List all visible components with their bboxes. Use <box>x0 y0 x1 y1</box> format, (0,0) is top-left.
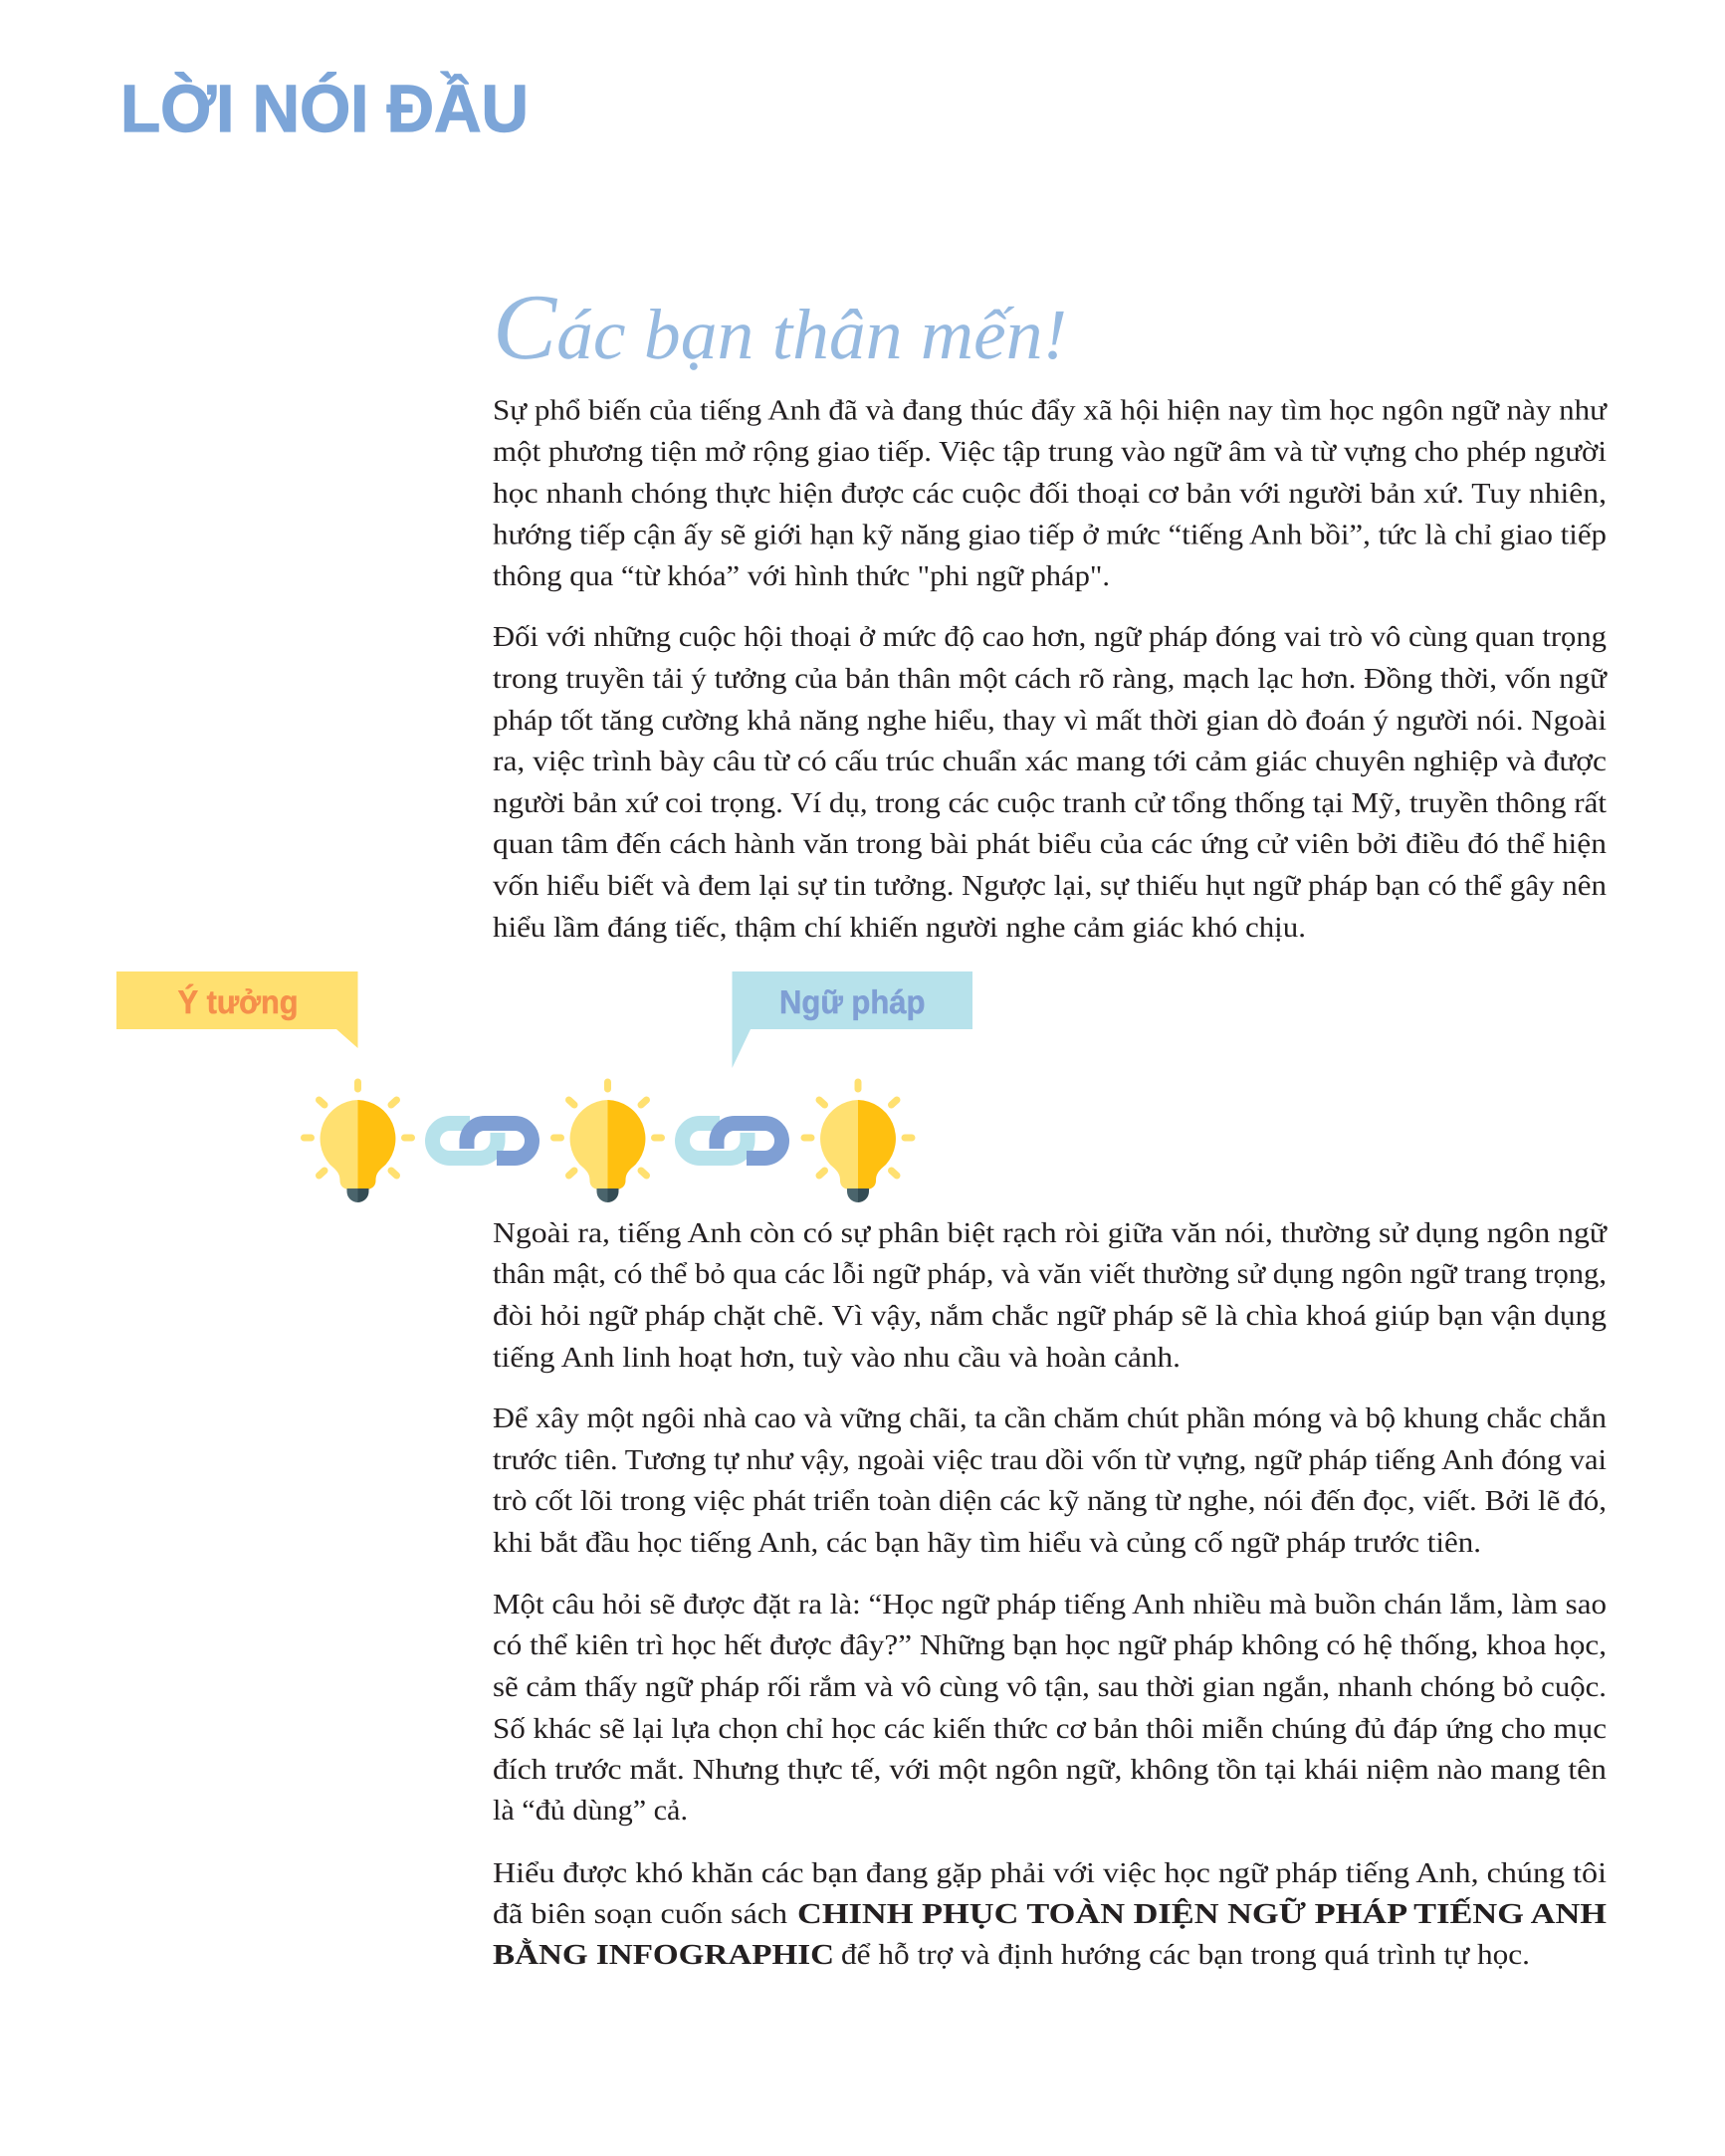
paragraph 6 <box>493 1857 1608 1971</box>
paragraph 5: là “đủ dùng” cả. <box>493 1795 688 1827</box>
callout: Ý tưởng: Ý tưởng <box>178 983 299 1020</box>
paragraph 1: học nhanh chóng thực hiện được các cuộc đối thoại cơ bản với người bản xứ. Tuy nhiên, <box>493 478 1607 510</box>
callout: Ngữ pháp <box>733 971 972 1068</box>
paragraph 4: Để xây một ngôi nhà cao và vững chãi, ta cần chăm chút phần móng và bộ khung chắc chắn <box>493 1402 1608 1434</box>
paragraph 2: hiểu lầm đáng tiếc, thậm chí khiến người nghe cảm giác khó chịu. <box>493 912 1306 944</box>
icon: light bulb 3 <box>804 1082 912 1202</box>
paragraph 5 <box>493 1589 1608 1827</box>
paragraph 3: thân mật, có thể bỏ qua các lỗi ngữ pháp, và văn viết thường sử dụng ngôn ngữ trang trọng, <box>493 1258 1607 1290</box>
paragraph 2: quan tâm đến cách hành văn trong bài phát biểu của các ứng cử viên bởi điều đó thể hiện <box>493 828 1608 860</box>
icon: light bulb 1 <box>305 1082 412 1202</box>
icon: chain link 2 <box>683 1123 782 1159</box>
paragraph 1: thông qua “từ khóa” với hình thức "phi ngữ pháp". <box>493 560 1110 592</box>
title: LỜI NÓI ĐẦU <box>120 71 529 146</box>
paragraph 2 <box>493 621 1608 944</box>
paragraph 2: trong truyền tải ý tưởng của bản thân một cách rõ ràng, mạch lạc hơn. Đồng thời, vốn ngữ <box>493 663 1608 695</box>
paragraph 4: trước tiên. Tương tự như vậy, ngoài việc trau dồi vốn từ vựng, ngữ pháp tiếng Anh đóng vai <box>493 1444 1607 1476</box>
paragraph 3 <box>493 1217 1608 1374</box>
paragraph 5: Số khác sẽ lại lựa chọn chỉ học các kiến thức cơ bản thôi miễn chúng đủ đáp ứng cho mục <box>493 1713 1607 1745</box>
paragraph 6: để hỗ trợ và định hướng các bạn trong quá trình tự học. <box>841 1939 1530 1971</box>
paragraph 1 <box>493 394 1608 592</box>
paragraph 6: Hiểu được khó khăn các bạn đang gặp phải với việc học ngữ pháp tiếng Anh, chúng tôi <box>493 1857 1607 1889</box>
paragraph 4: khi bắt đầu học tiếng Anh, các bạn hãy tìm hiểu và củng cố ngữ pháp trước tiên. <box>493 1527 1481 1559</box>
paragraph 2: ra, việc trình bày câu từ có cấu trúc chuẩn xác mang tới cảm giác chuyên nghiệp và được <box>493 746 1607 777</box>
paragraph 2: Đối với những cuộc hội thoại ở mức độ cao hơn, ngữ pháp đóng vai trò vô cùng quan trọng <box>493 621 1607 653</box>
callout: Ngữ pháp: Ngữ pháp <box>779 983 926 1020</box>
paragraph 3: đòi hỏi ngữ pháp chặt chẽ. Vì vậy, nắm chắc ngữ pháp sẽ là chìa khoá giúp bạn vận dụng <box>493 1300 1607 1332</box>
paragraph 4 <box>493 1402 1608 1559</box>
paragraph 3: Ngoài ra, tiếng Anh còn có sự phân biệt rạch ròi giữa văn nói, thường sử dụng ngôn ngữ <box>493 1217 1608 1249</box>
paragraph 6: đã biên soạn cuốn sách <box>493 1898 788 1930</box>
callout: Ý tưởng <box>116 971 358 1048</box>
paragraph 5: có thể kiên trì học hết được đây?” Những bạn học ngữ pháp không có hệ thống, khoa học, <box>493 1629 1607 1661</box>
paragraph 5: Một câu hỏi sẽ được đặt ra là: “Học ngữ pháp tiếng Anh nhiều mà buồn chán lắm, làm sao <box>493 1589 1607 1620</box>
paragraph 6: CHINH PHỤC TOÀN DIỆN NGỮ PHÁP TIẾNG ANH <box>797 1897 1608 1930</box>
paragraph 1: Sự phổ biến của tiếng Anh đã và đang thúc đẩy xã hội hiện nay tìm học ngôn ngữ này như <box>493 394 1608 426</box>
icon: light bulb 2 <box>553 1082 661 1202</box>
paragraph 1: một phương tiện mở rộng giao tiếp. Việc tập trung vào ngữ âm và từ vựng cho phép người <box>493 436 1607 468</box>
paragraph 2: vốn hiểu biết và đem lại sự tin tưởng. Ngược lại, sự thiếu hụt ngữ pháp bạn có thể gây nên <box>493 870 1608 902</box>
paragraph 2: người bản xứ coi trọng. Ví dụ, trong các cuộc tranh cử tổng thống tại Mỹ, truyền thông rất <box>493 787 1607 819</box>
paragraph 2: pháp tốt tăng cường khả năng nghe hiểu, thay vì mất thời gian dò đoán ý người nói. Ngoài <box>493 705 1607 737</box>
paragraph 4: trò cốt lõi trong việc phát triển toàn diện các kỹ năng từ nghe, nói đến đọc, viết. Bởi lẽ đó, <box>493 1485 1607 1517</box>
paragraph 5: đích trước mắt. Nhưng thực tế, với một ngôn ngữ, không tồn tại khái niệm nào mang tên <box>493 1754 1608 1786</box>
paragraph 3: tiếng Anh linh hoạt hơn, tuỳ vào nhu cầu và hoàn cảnh. <box>493 1342 1181 1374</box>
paragraph 1: hướng tiếp cận ấy sẽ giới hạn kỹ năng giao tiếp ở mức “tiếng Anh bồi”, tức là chỉ giao tiếp <box>493 520 1607 551</box>
icon: chain link 1 <box>432 1123 532 1159</box>
script heading: Các bạn thân mến! <box>493 276 1067 379</box>
paragraph 6: BẰNG INFOGRAPHIC <box>493 1938 834 1971</box>
paragraph 5: sẽ cảm thấy ngữ pháp rối rắm và vô cùng vô tận, sau thời gian ngắn, nhanh chóng bỏ cuộc. <box>493 1671 1607 1703</box>
